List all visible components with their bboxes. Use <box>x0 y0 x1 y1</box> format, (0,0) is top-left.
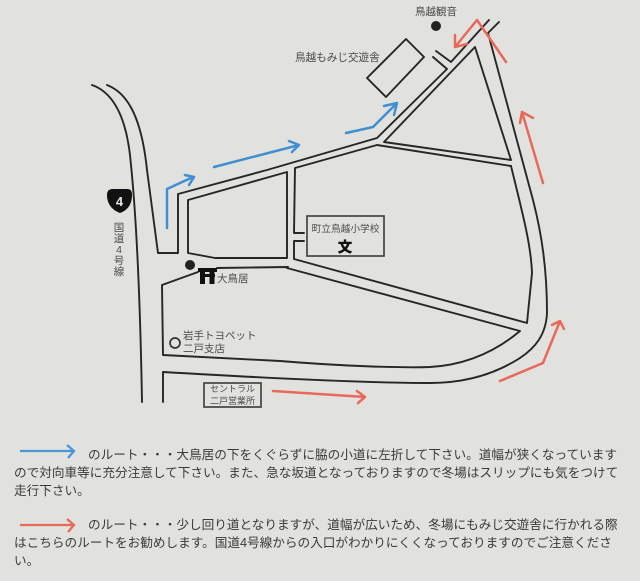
label: momiji koyusha: 鳥越もみじ交遊舎 <box>295 51 380 64</box>
label: route 4 vertical: 道 <box>114 232 125 245</box>
box: central office: セントラル <box>210 384 255 394</box>
building: momiji koyusha <box>367 39 424 97</box>
red route arrow right <box>520 112 543 183</box>
box: elementary school <box>307 216 384 256</box>
route 4 shield <box>107 189 132 213</box>
text block: red route: い。 <box>14 554 39 568</box>
label: toyopet: 二戸支店 <box>183 343 225 355</box>
label: route 4 vertical: 号 <box>114 255 124 267</box>
red route arrow curve <box>500 321 564 381</box>
text block: red route: はこちらのルートをお勧めします。国道4号線からの入口がわかりにくくなっておりますのでご注意くださ <box>14 535 612 550</box>
text block: blue route: ので対向車等に充分注意して下さい。また、急な坂道となっておりますので冬場はスリップにも気をつけて <box>14 465 618 480</box>
label: route 4 vertical <box>114 222 125 278</box>
text block: red route: のルート・・・少し回り道となりますが、道幅が広いため、冬場にもみじ交遊舎に行かれる際 <box>88 517 618 532</box>
box: elementary school: 文 <box>338 239 352 255</box>
text block: blue route: 走行下さい。 <box>14 484 90 498</box>
label: route 4 vertical: 国 <box>114 222 124 234</box>
label: torii: 大鳥居 <box>217 272 248 285</box>
legend arrow: blue <box>20 445 74 458</box>
red route arrow bottom <box>273 391 365 403</box>
route 4 shield: 4 <box>116 194 124 209</box>
blue route arrow 2 <box>214 141 299 167</box>
blue route arrow 1 <box>167 175 194 228</box>
box: elementary school: 町立鳥越小学校 <box>312 222 380 235</box>
text block: red route <box>14 517 618 568</box>
text block: blue route: のルート・・・大鳥居の下をくぐらずに脇の小道に左折して下さい。道幅が狭くなっています <box>88 448 617 462</box>
icon: torii gate <box>198 268 217 284</box>
box: central office <box>204 383 261 407</box>
box: central office: 二戸営業所 <box>210 395 255 406</box>
label: route 4 vertical: 4 <box>116 244 122 256</box>
marker: toyopet <box>170 338 180 348</box>
label: route 4 vertical: 線 <box>114 265 125 278</box>
text block: blue route <box>14 448 618 498</box>
red route arrow top <box>455 20 506 62</box>
road network <box>92 20 547 402</box>
label: torigoe kannon: 鳥越観音 <box>415 5 457 18</box>
label: toyopet <box>183 329 256 355</box>
blue route arrow 3 <box>346 103 397 133</box>
legend arrow: red <box>20 519 74 532</box>
label: toyopet: 岩手トヨペット <box>183 329 256 342</box>
marker: torigoe kannon <box>431 21 441 31</box>
marker: torii point <box>185 260 195 270</box>
